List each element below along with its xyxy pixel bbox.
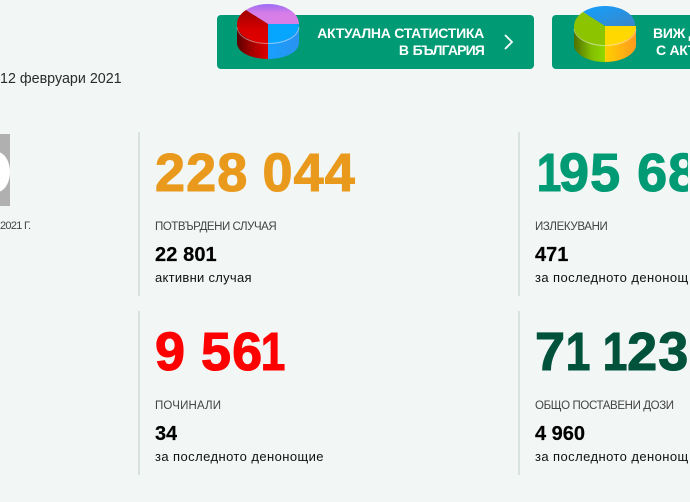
number: recovered: 1: [537, 143, 562, 203]
button label: [317, 25, 484, 58]
icon: pie chart blue green yellow: [574, 6, 636, 62]
number: deaths: 9 56: [155, 322, 263, 382]
button label: В БЪЛГАРИЯ: [399, 42, 484, 58]
number: deaths: 1: [261, 322, 286, 382]
cropped white digit: [0, 152, 10, 192]
label: confirmed: ПОТВЪРДЕНИ СЛУЧАЯ: [155, 221, 276, 233]
icon: pie chart red blue purple: [236, 4, 300, 59]
number: doses last day: 4 960: [535, 423, 585, 445]
number: doses: 7 23: [535, 322, 688, 382]
panel: deaths: [138, 311, 480, 475]
label: recovered: ИЗЛЕКУВАНИ: [535, 221, 607, 233]
purple top slice: [246, 4, 299, 24]
side of the pie: [574, 27, 605, 62]
blue top slice: [583, 6, 635, 26]
number: confirmed: 228 044: [155, 143, 356, 203]
green top slice: [574, 12, 605, 45]
label: doses: ОБЩО ПОСТАВЕНИ ДОЗИ: [535, 400, 674, 412]
cropped grey image tile: [0, 134, 10, 206]
number: doses: 1: [566, 322, 591, 382]
button label: АКТУАЛНА СТАТИСТИКА: [317, 25, 484, 41]
label: active: активни случая: [155, 270, 252, 285]
red top slice: [237, 10, 268, 43]
label: deaths: ПОЧИНАЛИ: [155, 400, 221, 412]
panel: confirmed cases: [138, 132, 480, 296]
number: recovered last day: 471: [535, 244, 568, 266]
panel: vaccine doses: [518, 311, 690, 475]
cropped date caption: 2021 Г.: [0, 220, 30, 232]
number: doses: 1: [603, 322, 628, 382]
number: active: 22 801: [155, 244, 217, 266]
number: deaths last day: 34: [155, 423, 177, 445]
button label: [653, 25, 690, 58]
button: view with current data (cropped): [552, 15, 690, 69]
button: current statistics in Bulgaria: [217, 15, 534, 69]
date text: 12 февруари 2021: [0, 71, 122, 87]
yellow top slice: [605, 26, 636, 45]
label: last day: за последното денонощие: [155, 449, 324, 464]
panel: recovered: [518, 132, 690, 296]
side of the pie: [237, 24, 268, 59]
icon: chevron right: [504, 34, 514, 50]
blue top slice: [268, 24, 299, 43]
